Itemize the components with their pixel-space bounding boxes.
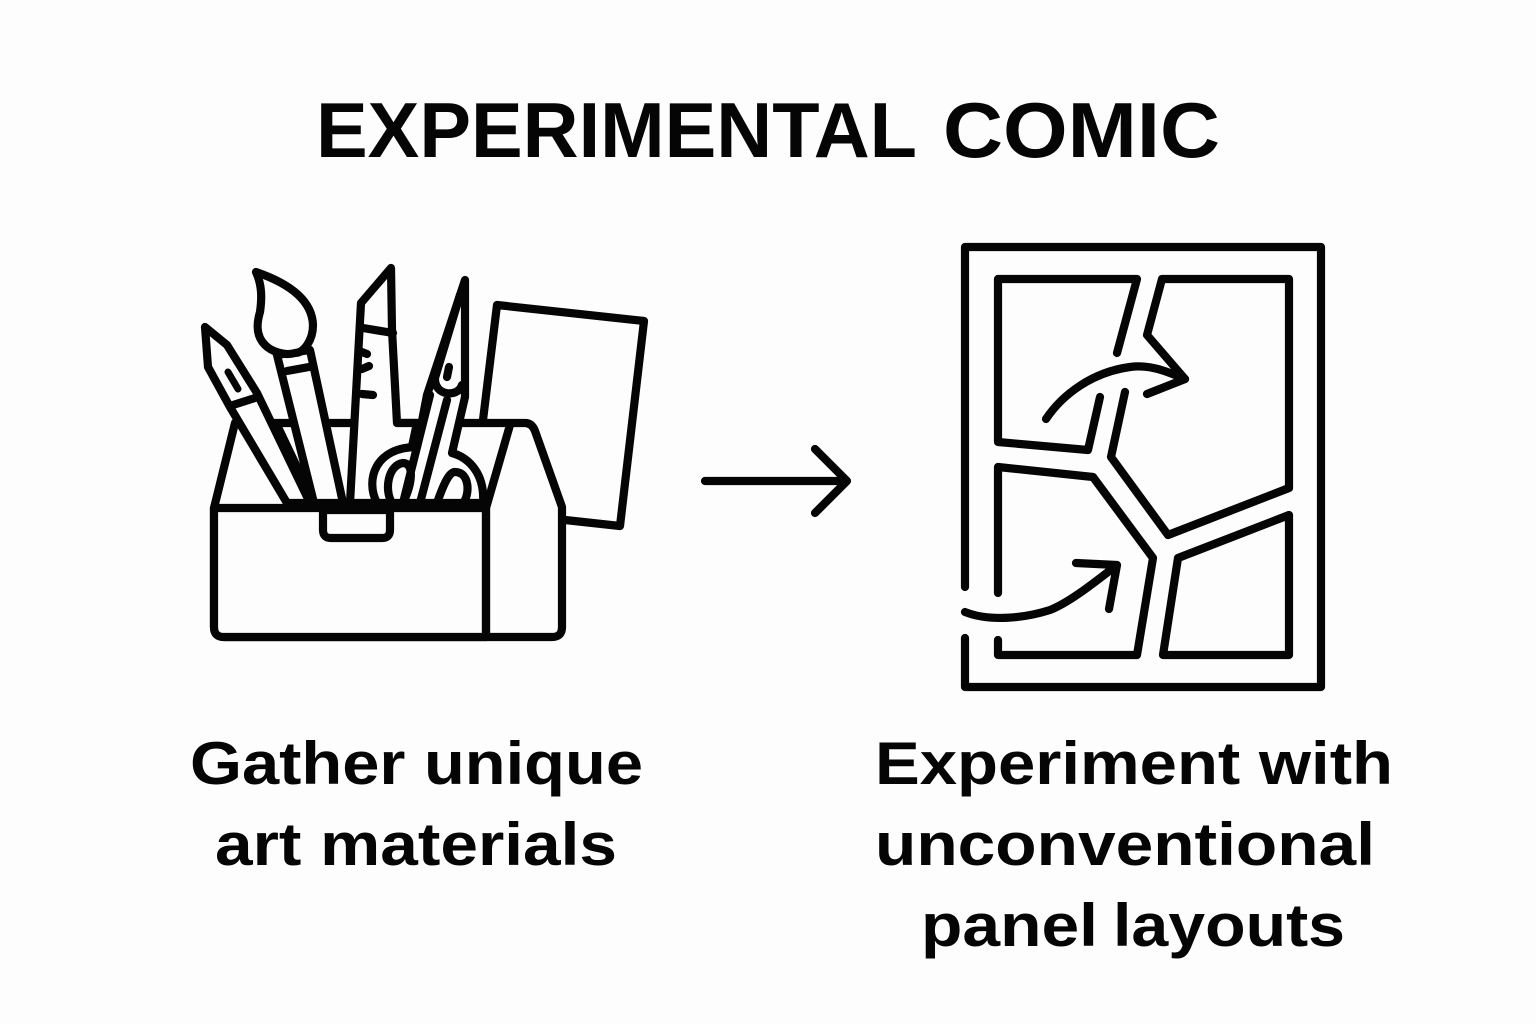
craft knife <box>350 268 417 503</box>
label: experiment with layouts <box>875 730 1393 959</box>
icon: toolbox with art materials <box>205 268 644 637</box>
label: experiment with layouts: Experiment with <box>875 730 1393 797</box>
title: COMIC <box>943 86 1220 174</box>
toolbox clasp <box>323 510 390 538</box>
calligraphy pen <box>205 327 310 503</box>
label: gather materials: art materials <box>215 811 617 878</box>
panel four <box>1163 515 1289 655</box>
title <box>316 86 1220 174</box>
panel three <box>998 467 1153 655</box>
label: experiment with layouts: panel <box>921 892 1098 959</box>
outer page frame <box>965 247 1321 687</box>
label: experiment with layouts: unconventional <box>875 811 1375 878</box>
arrow: process flow <box>705 449 847 513</box>
curved arrow bottom <box>965 563 1117 618</box>
panel two <box>1111 279 1289 535</box>
icon: unconventional comic panels <box>965 247 1321 687</box>
title: EXPERIMENTAL <box>316 86 917 174</box>
label: experiment with layouts: layouts <box>1113 892 1345 959</box>
toolbox front <box>214 508 486 637</box>
paper sheet <box>483 305 644 526</box>
label: gather materials <box>190 730 643 878</box>
toolbox side divider <box>486 425 510 637</box>
scissors <box>372 280 483 503</box>
toolbox back lid <box>214 423 562 637</box>
paintbrush <box>256 272 343 503</box>
panel one <box>998 279 1137 450</box>
label: gather materials: Gather unique <box>190 730 643 797</box>
curved arrow top <box>1046 366 1185 419</box>
